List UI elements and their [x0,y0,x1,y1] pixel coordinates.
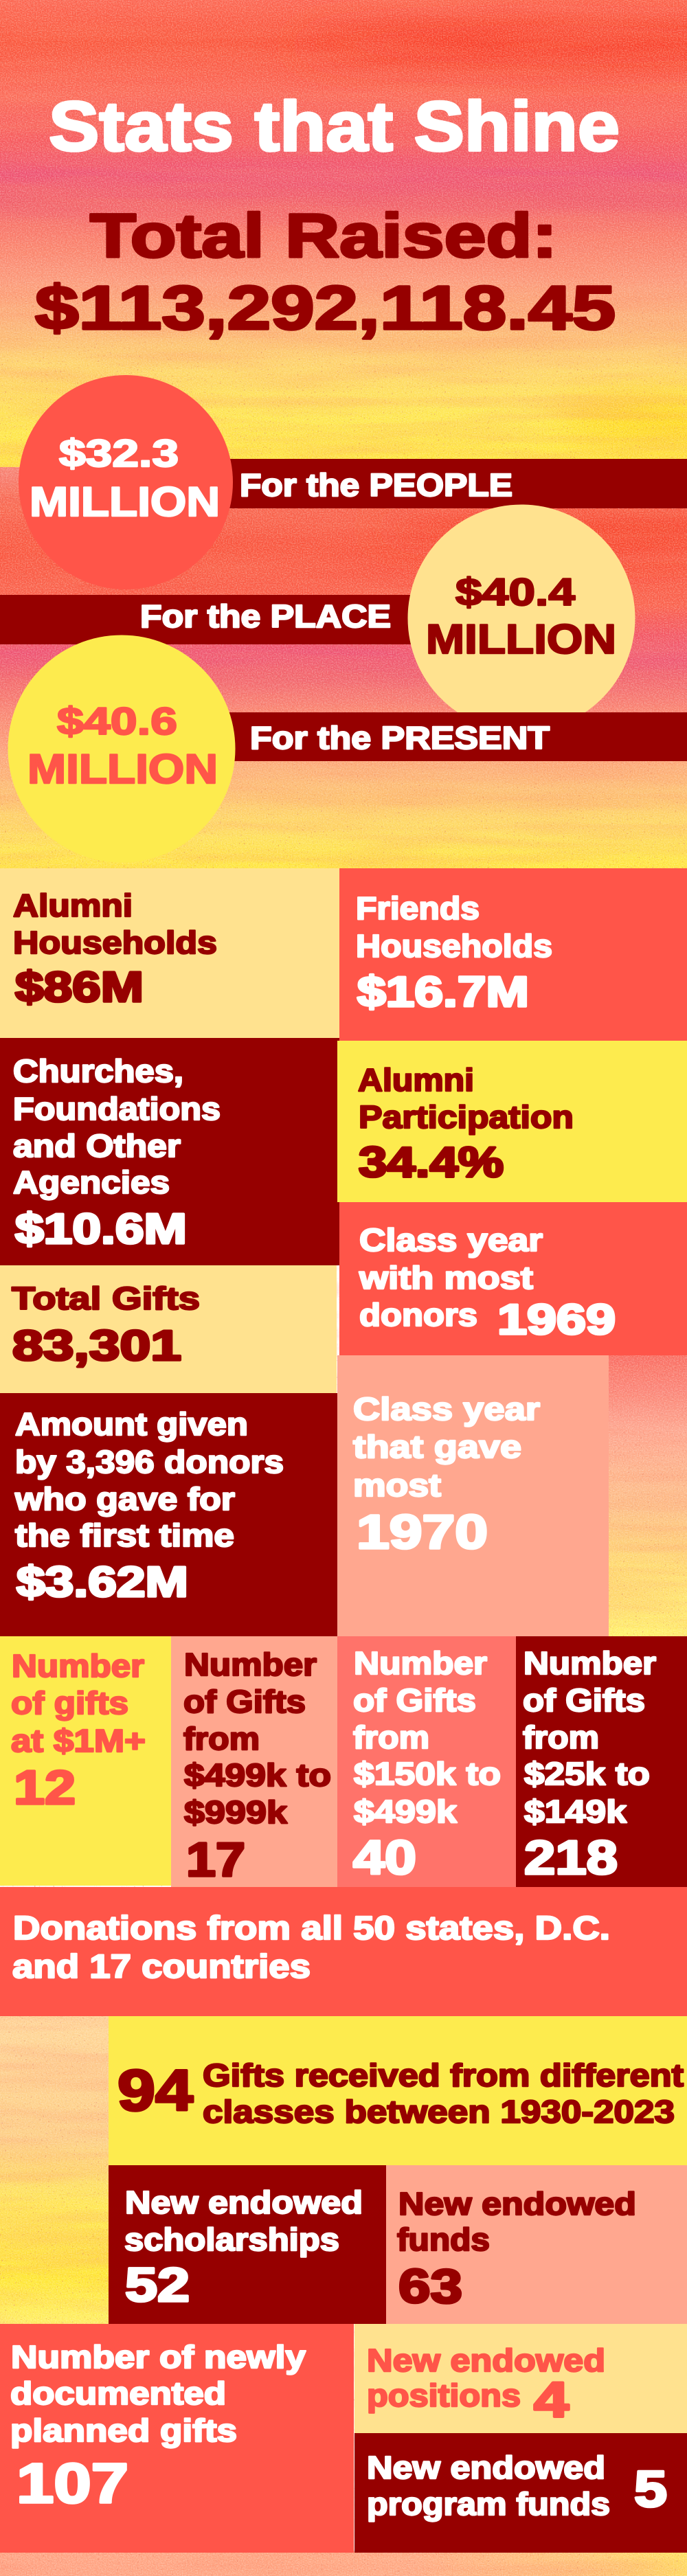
panel: class year that gave most: that gave [353,1429,521,1465]
panel: gifts $25k to $149k: $149k [524,1794,627,1829]
panel: gifts from different classes: 94 [117,2058,193,2123]
circle: $40.6 million [8,635,235,863]
circle: $40.4 million: MILLION [426,616,616,662]
panel: newly documented planned gifts [0,2324,354,2553]
panel: class year that gave most: Class year [353,1391,540,1427]
panel: gifts $499k to $999k: $499k to [184,1757,331,1793]
panel: alumni households: Households [13,925,217,960]
banner: for the people [227,459,687,508]
heading: total raised: $113,292,118.45 [35,274,616,343]
panel: gifts from different classes [109,2016,687,2165]
circle: $40.6 million: MILLION [27,746,218,792]
panel: newly documented planned gifts: 107 [16,2452,128,2515]
panel: newly documented planned gifts: documented [10,2375,226,2411]
panel: friends households: Households [356,928,552,964]
panel: class year with most donors: 1969 [497,1296,616,1344]
panel: gifts $150k to $499k: of Gifts [353,1682,476,1718]
panel: new endowed positions: New endowed [367,2342,605,2378]
panel: new endowed funds [386,2165,687,2324]
panel: new endowed positions: positions [367,2377,521,2413]
panel: gifts $25k to $149k: of Gifts [523,1682,645,1718]
panel: new endowed program funds: 5 [634,2461,667,2518]
panel: class year with most donors [339,1202,687,1355]
panel: donations from all states: Donations from all 50 states, D.C. [13,1910,610,1947]
title: Stats that Shine [49,87,620,166]
panel: gifts $499k to $999k [171,1636,337,1887]
panel: new endowed program funds: program funds [367,2486,610,2522]
banner: for the people: For the PEOPLE [240,467,513,503]
panel: class year with most donors: donors [359,1297,477,1333]
panel: class year with most donors: Class year [359,1222,543,1258]
panel: alumni participation: 34.4% [359,1139,504,1186]
panel: gifts $25k to $149k: $25k to [524,1756,650,1792]
panel: alumni participation: Alumni [358,1062,474,1098]
banner: for the place [0,595,419,644]
panel: new endowed scholarships: New endowed [125,2184,363,2220]
panel: churches, foundations and other agencies: and Other [13,1128,181,1164]
panel: donations from all states: and 17 countries [12,1949,311,1985]
panel: new endowed funds: 63 [398,2259,462,2313]
circle: $32.3 million [19,375,233,589]
panel: gifts at $1M+ [0,1636,171,1886]
panel: total gifts: 83,301 [12,1322,181,1370]
panel: newly documented planned gifts: planned gifts [10,2413,237,2448]
panel: churches, foundations and other agencies: Agencies [13,1164,170,1200]
panel: gifts $499k to $999k: Number [184,1647,317,1682]
panel: gifts $25k to $149k: 218 [524,1831,618,1884]
panel: gifts $25k to $149k: from [523,1719,599,1755]
circle: $40.4 million: $40.4 [455,570,575,613]
panel: friends households: $16.7M [357,969,529,1016]
banner: for the present [227,712,687,761]
panel: first-time donors: $3.62M [16,1559,188,1606]
panel: total gifts: Total Gifts [12,1280,200,1316]
panel: gifts $25k to $149k: Number [523,1645,656,1681]
circle: $40.4 million [408,504,635,732]
panel: new endowed positions: 4 [534,2373,569,2428]
panel: gifts $150k to $499k: $499k [354,1794,457,1829]
banner: for the place: For the PLACE [140,598,391,634]
banner: for the present: For the PRESENT [250,720,550,756]
panel: first-time donors: Amount given [15,1406,248,1442]
panel: friends households [339,868,687,1041]
panel: class year that gave most [337,1355,609,1636]
panel: gifts $150k to $499k: from [353,1719,429,1755]
circle: $32.3 million: MILLION [30,479,220,525]
panel: alumni households [0,868,339,1038]
panel: first-time donors [0,1393,337,1636]
panel: churches, foundations and other agencies: Foundations [13,1091,221,1127]
heading: total raised: Total Raised: [90,202,557,271]
panel: new endowed scholarships: scholarships [124,2222,339,2257]
panel: alumni households: $86M [15,964,144,1011]
panel: gifts $150k to $499k: $150k to [354,1756,501,1792]
panel: total gifts [0,1265,337,1393]
panel: friends households: Friends [356,890,480,926]
panel: first-time donors: who gave for [14,1481,235,1517]
panel: new endowed program funds: New endowed [367,2450,605,2485]
circle: $40.6 million: $40.6 [57,699,177,743]
panel: churches, foundations and other agencies: $10.6M [15,1206,187,1253]
panel: class year that gave most: 1970 [357,1505,488,1559]
panel: gifts at $1M+: of gifts [11,1685,128,1721]
panel: first-time donors: by 3,396 donors [15,1444,284,1480]
panel: gifts $150k to $499k: 40 [353,1831,416,1884]
panel: alumni households: Alumni [13,888,133,923]
panel: alumni participation: Participation [359,1099,574,1135]
panel: churches, foundations and other agencies: Churches, [13,1053,183,1089]
panel: gifts $499k to $999k: 17 [186,1833,245,1886]
panel: new endowed scholarships [109,2165,386,2324]
panel: class year with most donors: with most [359,1260,533,1296]
panel: gifts $499k to $999k: of Gifts [183,1684,306,1719]
panel: first-time donors: the first time [15,1517,234,1553]
panel: new endowed program funds [354,2433,687,2553]
panel: class year that gave most: most [353,1467,441,1503]
panel: gifts $499k to $999k: from [183,1721,260,1756]
panel: gifts from different classes: classes between 1930-2023 [203,2094,675,2129]
panel: churches, foundations and other agencies [0,1038,339,1265]
panel: alumni participation [337,1041,687,1202]
circle: $32.3 million: $32.3 [59,431,179,475]
panel: gifts at $1M+: at $1M+ [11,1723,146,1759]
panel: new endowed positions [354,2324,687,2433]
panel: new endowed funds: funds [397,2222,490,2257]
panel: gifts at $1M+: Number [12,1648,144,1684]
panel: donations from all states [0,1887,687,2016]
panel: gifts $25k to $149k [516,1636,687,1887]
heading: total raised [35,202,616,343]
panel: new endowed scholarships: 52 [125,2258,190,2312]
panel: gifts from different classes: Gifts received from different [203,2057,684,2093]
panel: gifts $150k to $499k: Number [354,1645,487,1681]
panel: gifts $150k to $499k [337,1636,516,1887]
panel: gifts at $1M+: 12 [14,1761,76,1814]
panel: newly documented planned gifts: Number of newly [11,2339,306,2375]
panel: gifts $499k to $999k: $999k [184,1794,287,1830]
panel: new endowed funds: New endowed [398,2186,636,2222]
